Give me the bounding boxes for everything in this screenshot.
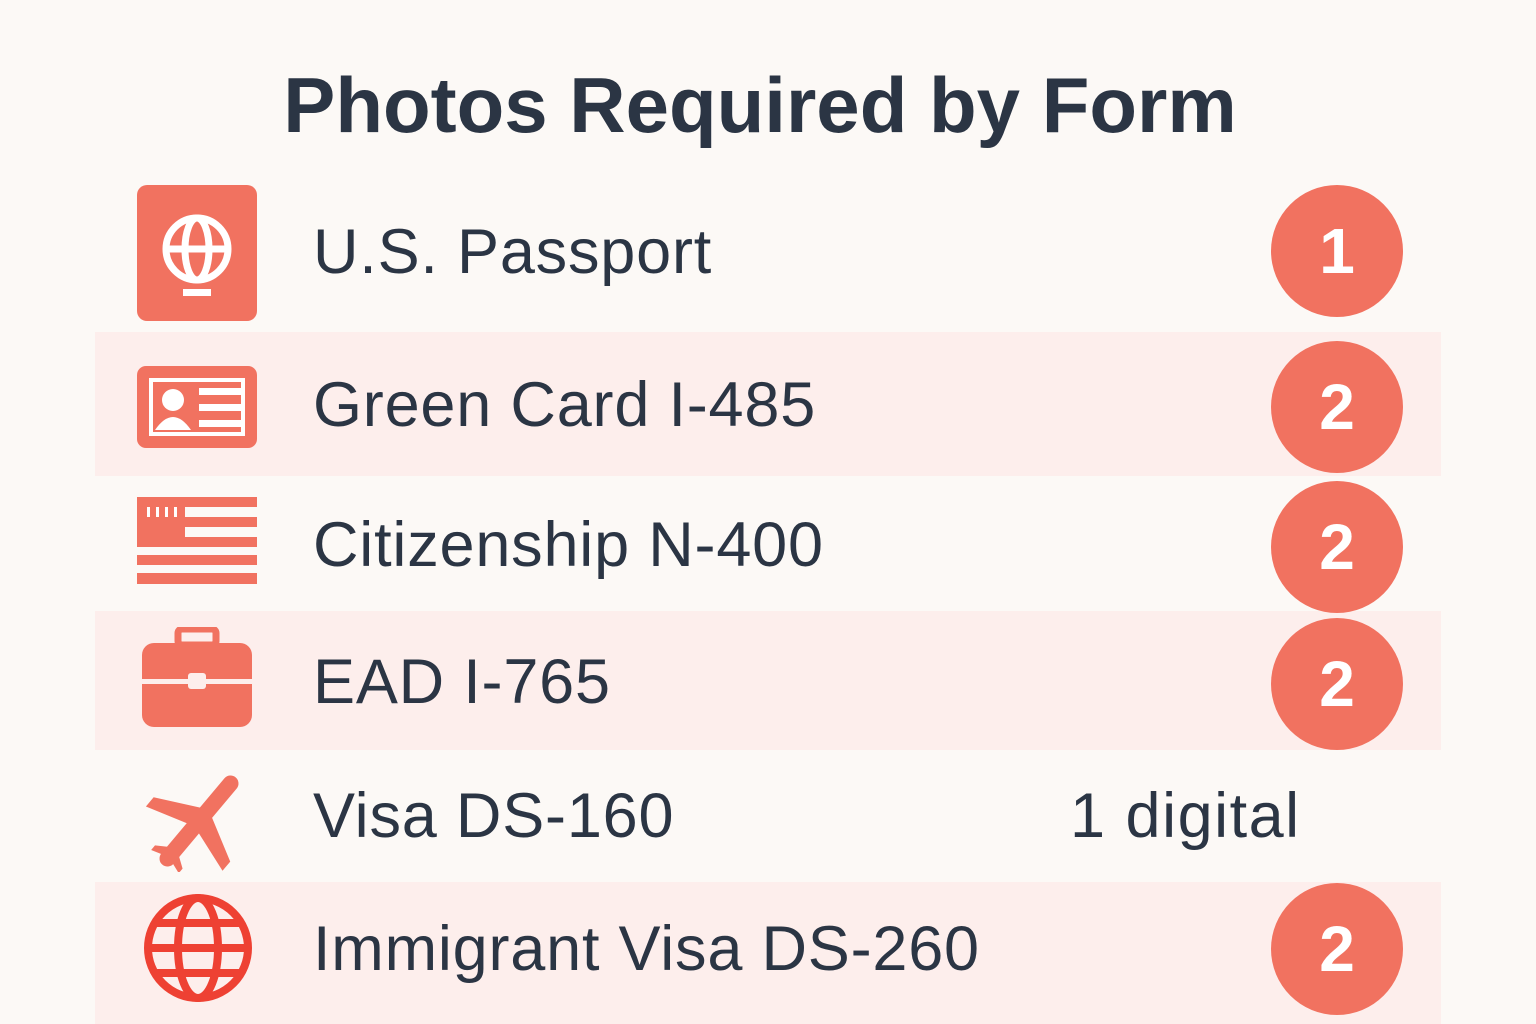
count: EAD: 2 <box>1319 648 1355 720</box>
label: immigrant visa: Immigrant Visa DS-260 <box>313 914 980 984</box>
icon: flag <box>137 497 257 584</box>
count: immigrant visa: 2 <box>1319 913 1355 985</box>
count: EAD <box>1271 618 1403 750</box>
count: citizenship: 2 <box>1319 511 1355 583</box>
icon: passport <box>137 185 257 321</box>
label: EAD: EAD I-765 <box>313 647 611 717</box>
icon: briefcase <box>142 627 252 727</box>
label: citizenship: Citizenship N-400 <box>313 510 824 580</box>
icon: plane <box>146 776 238 872</box>
count: visa digital: 1 digital <box>1070 781 1301 851</box>
count: green card <box>1271 341 1403 473</box>
count: passport <box>1271 185 1403 317</box>
count: green card: 2 <box>1319 371 1355 443</box>
count: citizenship <box>1271 481 1403 613</box>
title: Photos Required by Form <box>283 61 1237 149</box>
icon: green card <box>137 366 257 448</box>
icon: globe <box>144 894 252 1002</box>
count: passport: 1 <box>1319 215 1355 287</box>
count: immigrant visa <box>1271 883 1403 1015</box>
label: green card: Green Card I-485 <box>313 370 816 440</box>
label: visa: Visa DS-160 <box>313 781 674 851</box>
label: passport: U.S. Passport <box>313 217 712 287</box>
